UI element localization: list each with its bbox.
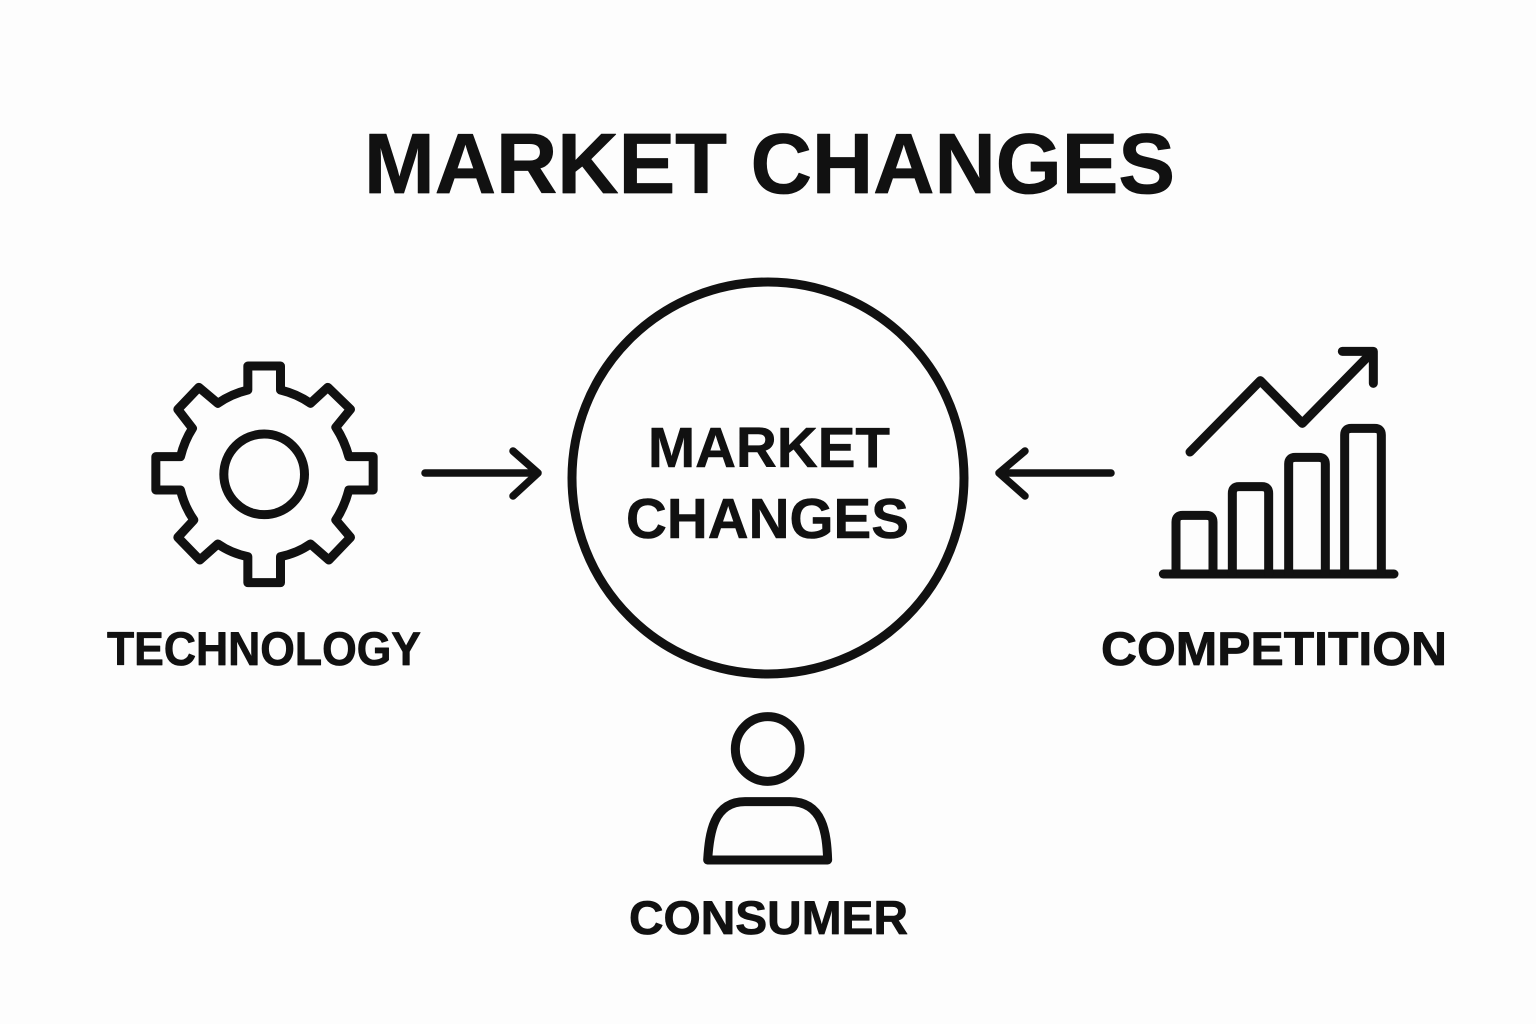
trend arrow [1190,351,1373,452]
arrow: competition to market changes [999,451,1111,496]
title: MARKET CHANGES [364,117,1175,212]
baseline [1163,560,1394,587]
central circle with label [572,282,964,674]
icon: consumer person [708,717,828,860]
circle outline [572,282,964,674]
label: technology: TECHNOLOGY [107,622,421,675]
icon: gear [156,366,373,583]
circle label [626,416,909,551]
icon: bar chart with rising arrow [1163,351,1394,574]
label: competition: COMPETITION [1101,622,1447,675]
circle label: MARKET [648,416,890,480]
bars [1176,428,1381,574]
circle label: CHANGES [626,487,909,551]
arrow: technology to market changes [425,451,538,496]
label: consumer: CONSUMER [629,891,908,944]
